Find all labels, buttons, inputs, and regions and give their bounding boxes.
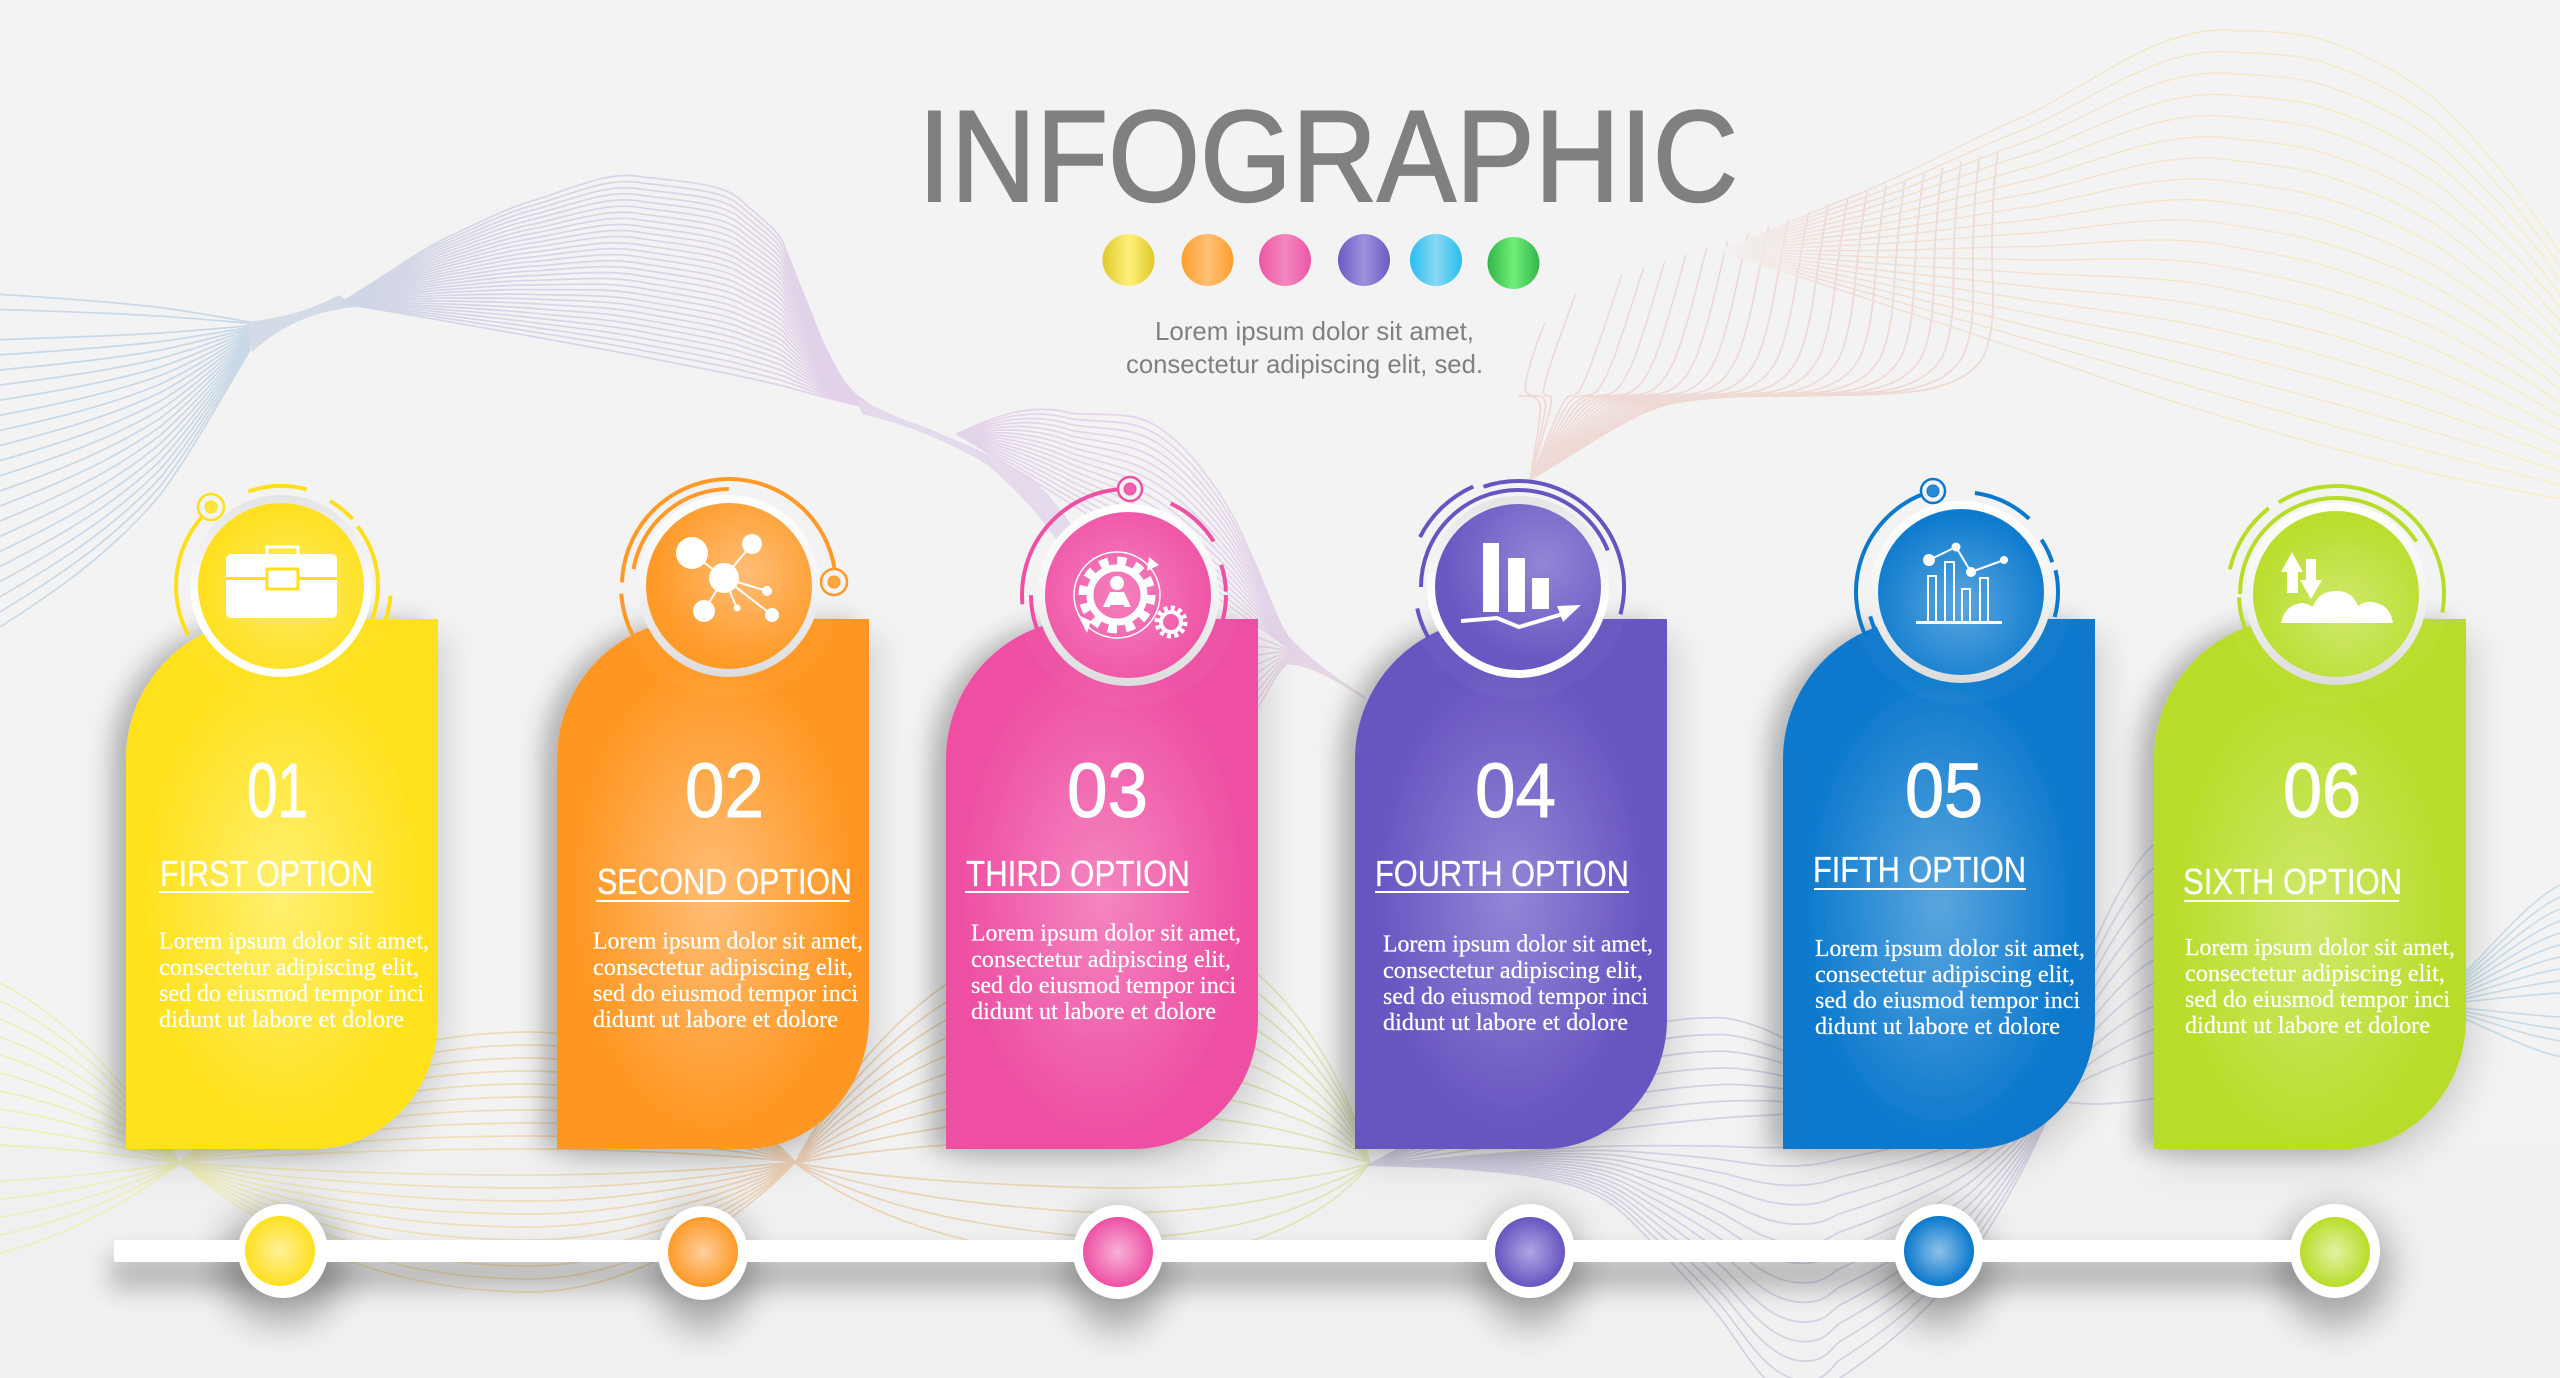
- body text: sed do eiusmod tempor inci: [971, 973, 1236, 999]
- number: 04: [1475, 748, 1556, 834]
- icon badge: arrows and cloud: [2187, 445, 2485, 743]
- body text: consectetur adipiscing elit,: [593, 955, 853, 981]
- marker 2: [658, 1206, 748, 1300]
- panel: sixth option: [2154, 445, 2485, 1149]
- heading: FIFTH OPTION: [1813, 849, 2026, 890]
- body text: [593, 928, 863, 1033]
- panel: second option: [557, 436, 879, 1149]
- card body: [1783, 619, 2095, 1149]
- body text: [1383, 932, 1653, 1036]
- body text: consectetur adipiscing elit,: [1383, 958, 1643, 984]
- body text: sed do eiusmod tempor inci: [2185, 987, 2450, 1013]
- body text: didunt ut labore et dolore: [159, 1007, 404, 1033]
- body text: [159, 928, 429, 1033]
- body text: didunt ut labore et dolore: [1383, 1010, 1628, 1036]
- card body: [126, 619, 438, 1149]
- body text: Lorem ipsum dolor sit amet,: [159, 928, 429, 954]
- icon badge: bars and arrow: [1370, 439, 1666, 735]
- body text: didunt ut labore et dolore: [593, 1007, 838, 1033]
- body text: sed do eiusmod tempor inci: [1383, 984, 1648, 1010]
- marker 4: [1485, 1204, 1575, 1298]
- body text: [1815, 936, 2085, 1040]
- card body: [946, 619, 1258, 1149]
- panel: first option: [126, 444, 438, 1149]
- body text: Lorem ipsum dolor sit amet,: [1815, 936, 2085, 962]
- panel: fourth option: [1355, 439, 1667, 1149]
- number: 01: [247, 748, 308, 834]
- timeline bar: [114, 1240, 2335, 1262]
- body text: Lorem ipsum dolor sit amet,: [593, 928, 863, 954]
- body text: consectetur adipiscing elit,: [159, 955, 419, 981]
- heading: THIRD OPTION: [966, 853, 1190, 894]
- body text: [971, 920, 1241, 1025]
- subtitle text: [1126, 316, 1483, 379]
- icon badge: chart: [1821, 452, 2101, 732]
- heading: SIXTH OPTION: [2183, 861, 2402, 902]
- heading: FIRST OPTION: [160, 853, 373, 894]
- body text: didunt ut labore et dolore: [971, 999, 1216, 1025]
- number: 05: [1905, 748, 1983, 834]
- body text: sed do eiusmod tempor inci: [593, 981, 858, 1007]
- timeline: [110, 1204, 2390, 1330]
- heading: FOURTH OPTION: [1375, 853, 1629, 894]
- heading: SECOND OPTION: [597, 861, 852, 902]
- body text: Lorem ipsum dolor sit amet,: [1383, 932, 1653, 958]
- card body: [1355, 619, 1667, 1149]
- icon badge: gears and person: [994, 461, 1262, 729]
- marker 5: [1894, 1204, 1984, 1298]
- number: 02: [685, 748, 764, 834]
- marker 3: [1073, 1205, 1163, 1299]
- subtitle text: Lorem ipsum dolor sit amet,: [1155, 316, 1474, 346]
- body text: sed do eiusmod tempor inci: [1815, 988, 2080, 1014]
- body text: Lorem ipsum dolor sit amet,: [2185, 935, 2455, 961]
- panel: fifth option: [1783, 452, 2101, 1149]
- body text: [2185, 935, 2455, 1039]
- panel: third option: [946, 461, 1262, 1149]
- body text: sed do eiusmod tempor inci: [159, 981, 424, 1007]
- body text: didunt ut labore et dolore: [2185, 1013, 2430, 1039]
- marker 1: [238, 1204, 328, 1298]
- icon badge: network: [579, 436, 879, 736]
- subtitle text: consectetur adipiscing elit, sed.: [1126, 349, 1483, 379]
- body text: didunt ut labore et dolore: [1815, 1014, 2060, 1040]
- body text: consectetur adipiscing elit,: [971, 947, 1231, 973]
- icon badge: briefcase: [139, 444, 423, 728]
- number: 06: [2283, 748, 2361, 834]
- timeline shadow: [110, 1207, 2390, 1330]
- body text: consectetur adipiscing elit,: [1815, 962, 2075, 988]
- card body: [557, 619, 869, 1149]
- body text: Lorem ipsum dolor sit amet,: [971, 920, 1241, 946]
- card body: [2154, 619, 2466, 1149]
- body text: consectetur adipiscing elit,: [2185, 961, 2445, 987]
- title: INFOGRAPHIC: [918, 83, 1738, 229]
- number: 03: [1067, 748, 1148, 834]
- colour dots row: [1102, 234, 1540, 289]
- marker 6: [2290, 1204, 2380, 1298]
